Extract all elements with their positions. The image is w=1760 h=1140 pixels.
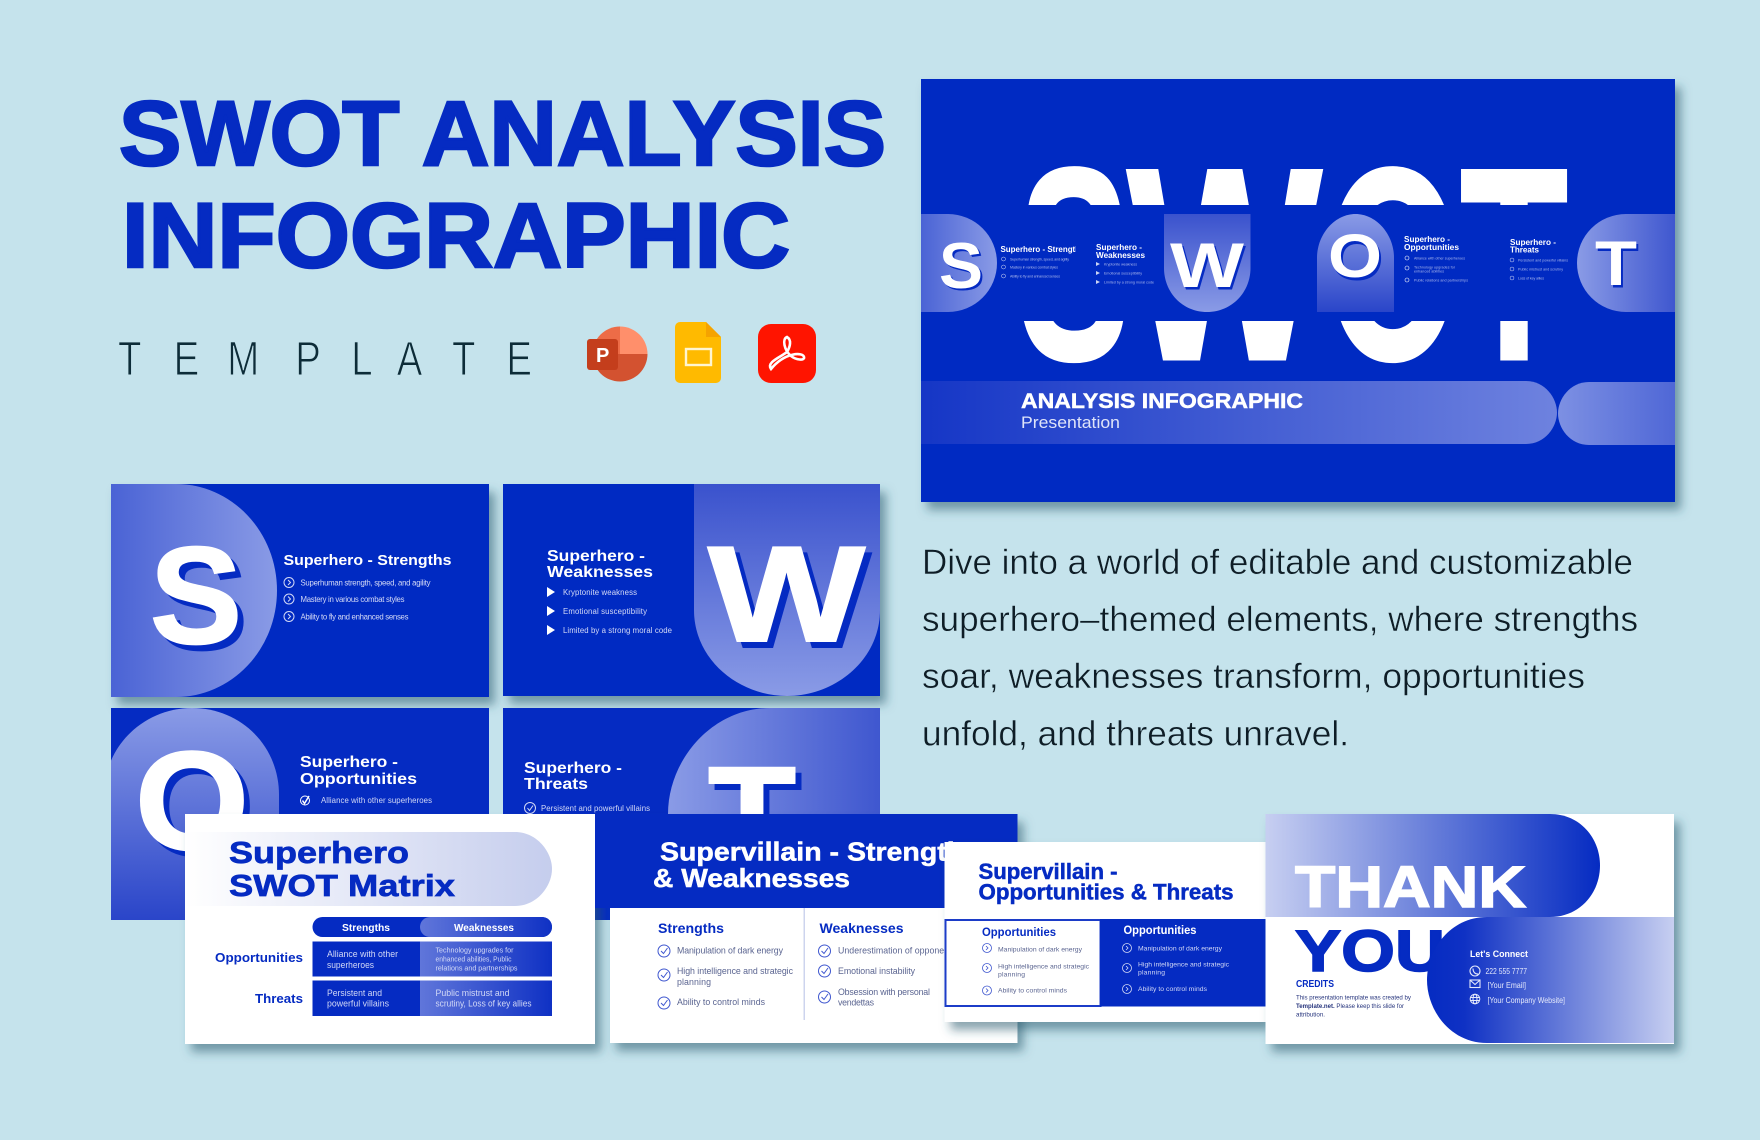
O letter: O — [135, 722, 249, 879]
matrix row 2: Public mistrust and — [436, 988, 510, 999]
cover title: ANALYSIS INFOGRAPHIC — [1021, 390, 1303, 413]
villain heading — [653, 836, 980, 893]
row label: opportunities: Opportunities — [215, 950, 303, 965]
big clipped SWOT word: W — [1127, 112, 1324, 418]
mini strengths text: Mastery in various combat styles — [1010, 265, 1058, 269]
panel: weaknesses slide — [503, 484, 880, 696]
column: strengths: Strengths — [658, 921, 724, 936]
mini weaknesses text: Emotional susceptibility — [1104, 271, 1142, 275]
matrix header pill: Weaknesses — [454, 922, 514, 934]
T letter — [708, 766, 802, 814]
filled box: Manipulation of dark energy — [1138, 946, 1223, 952]
big clipped SWOT word: S — [1018, 112, 1130, 418]
title — [119, 83, 886, 287]
mini weaknesses text: Kryptonite weakness — [1104, 262, 1137, 266]
strengths list: Ability to fly and enhanced senses — [300, 612, 409, 622]
column: strengths — [658, 921, 794, 1009]
weaknesses list: Emotional susceptibility — [563, 607, 647, 616]
S tab: S — [939, 229, 983, 302]
matrix row 2 — [312, 980, 552, 1016]
S tab: S — [941, 231, 985, 304]
icon: pdf — [758, 324, 816, 383]
matrix row 1: relations and partnerships — [436, 964, 518, 972]
column: strengths: Manipulation of dark energy — [677, 946, 784, 956]
column: strengths: Ability to control minds — [677, 997, 766, 1007]
weaknesses list: Kryptonite weakness — [563, 588, 637, 597]
T shape — [668, 708, 880, 814]
column: weaknesses: Emotional instability — [838, 966, 916, 976]
strengths list: Superhuman strength, speed, and agility — [300, 578, 431, 588]
mini weaknesses text: Limited by a strong moral code — [1104, 280, 1154, 284]
column: strengths: planning — [677, 977, 711, 987]
opportunities heading: Superhero - — [300, 754, 398, 771]
weaknesses heading — [547, 548, 653, 581]
subtitle: template: TEMPLATE — [118, 333, 532, 386]
filled box: Opportunities — [1124, 925, 1196, 937]
slide heading — [978, 859, 1234, 904]
column: strengths: High intelligence and strategic — [677, 966, 794, 976]
slide heading: Supervillain - — [978, 859, 1118, 884]
T letter: T — [708, 739, 796, 892]
mini opportunities text: Public relations and partnerships — [1414, 278, 1468, 282]
panel: supervillain opportunities and threats slide — [944, 842, 1266, 1022]
icon: powerpoint: P — [596, 345, 609, 367]
filled box: High intelligence and strategic — [1138, 962, 1230, 968]
matrix title: SWOT Matrix — [229, 868, 456, 903]
filled box: planning — [1138, 970, 1165, 976]
matrix title: Superhero — [229, 835, 409, 870]
contact block: 222 555 7777 — [1486, 966, 1527, 976]
threats items: and — [597, 823, 610, 832]
matrix row 2: Persistent and — [327, 988, 382, 999]
outlined box: High intelligence and strategic — [998, 964, 1090, 970]
O tab: O — [1328, 222, 1382, 290]
mini threats text: Loss of key allies — [1518, 276, 1544, 280]
contact block: [Your Email] — [1488, 980, 1526, 990]
icon: google slides — [675, 322, 721, 383]
slide heading: Opportunities & Threats — [978, 880, 1234, 904]
matrix title pill — [185, 832, 552, 906]
big clipped SWOT word: O — [1326, 112, 1460, 418]
column: weaknesses — [818, 923, 944, 1006]
matrix row 2: powerful villains — [327, 998, 389, 1010]
matrix row 2: scrutiny, Loss of key allies — [436, 998, 532, 1010]
bottom gradient pill — [1427, 917, 1674, 1043]
mini opportunities text: Opportunities — [1404, 242, 1459, 252]
filled box — [1100, 919, 1266, 1006]
weaknesses list — [547, 587, 672, 635]
opportunities item: Alliance with other superheroes — [321, 796, 432, 805]
W tab: W — [1170, 231, 1245, 301]
W tab: W — [1172, 234, 1247, 304]
panel: thank you slide — [1266, 814, 1674, 1044]
big clipped SWOT word — [1024, 166, 1568, 364]
row label: threats: Threats — [255, 991, 303, 1006]
T tab: T — [1597, 232, 1639, 302]
weaknesses list: Limited by a strong moral code — [563, 626, 672, 635]
weaknesses heading: Weaknesses — [547, 564, 653, 581]
threats heading: Superhero - — [524, 760, 622, 777]
contact block: Let's Connect — [1470, 949, 1529, 960]
weaknesses heading: Superhero - — [547, 548, 645, 565]
mini strengths text — [1000, 246, 1076, 278]
description paragraph: soar, weaknesses transform, opportunities — [922, 657, 1585, 696]
O letter — [140, 750, 250, 856]
mini strengths text: Superhero - Strengths — [1000, 244, 1085, 254]
description paragraph — [922, 543, 1638, 754]
icon: email — [1470, 980, 1480, 988]
outlined box: Manipulation of dark energy — [998, 946, 1083, 954]
description paragraph: superhero–themed elements, where strengths — [922, 600, 1638, 639]
panel: superhero swot matrix slide — [185, 814, 595, 1044]
column: weaknesses: vendettas — [838, 998, 875, 1008]
contact block: [Your Company Website] — [1488, 995, 1565, 1005]
description paragraph: Dive into a world of editable and customizable — [922, 543, 1633, 582]
W letter: W — [708, 518, 866, 670]
mini opportunities text: Technology upgrades for — [1414, 265, 1456, 269]
mini threats text: Threats — [1510, 244, 1539, 254]
mini threats text: Superhero - — [1510, 237, 1556, 247]
panel: opportunities slide — [104, 708, 489, 920]
credits text: This presentation template was created by — [1296, 994, 1412, 1002]
strengths list — [284, 578, 431, 622]
credits text: Template.net. Please keep this slide for — [1296, 1003, 1405, 1010]
big clipped SWOT word: T — [1460, 112, 1568, 418]
strengths list: Mastery in various combat styles — [300, 595, 405, 604]
outlined box — [946, 920, 1100, 1006]
filled box: Ability to control minds — [1138, 986, 1208, 993]
icon: powerpoint — [587, 326, 648, 381]
credits heading: CREDITS — [1296, 978, 1334, 990]
thank word: THANK — [1295, 855, 1526, 920]
mini opportunities text: enhanced abilities — [1414, 269, 1444, 273]
W shape — [694, 484, 880, 696]
mini strengths text: Ability to fly and enhanced senses — [1010, 274, 1060, 278]
matrix row 1: Technology upgrades for — [436, 946, 514, 954]
matrix row 1 — [312, 942, 552, 976]
W letter: W — [714, 524, 872, 676]
panel: strengths slide — [111, 484, 489, 697]
W tab — [1164, 214, 1250, 312]
threats heading: Threats — [524, 776, 588, 793]
S shape — [111, 484, 277, 697]
mini weaknesses text — [1096, 242, 1154, 284]
mini opportunities text: Alliance with other superheroes — [1414, 256, 1465, 260]
mini opportunities text: Superhero - — [1404, 234, 1450, 244]
credits text: attribution. — [1296, 1012, 1325, 1018]
O tab — [1317, 214, 1394, 312]
T tab: T — [1595, 229, 1637, 299]
contact block — [1470, 949, 1565, 1005]
credits text — [1296, 994, 1412, 1018]
title: INFOGRAPHIC — [122, 185, 790, 287]
O tab: O — [1330, 225, 1384, 293]
S letter: S — [156, 525, 248, 679]
bottom title bar — [921, 381, 1557, 444]
S letter: S — [150, 519, 242, 673]
matrix header pill: Strengths — [342, 922, 390, 934]
mini threats text: Public mistrust and scrutiny — [1518, 267, 1563, 271]
outlined box: Opportunities — [982, 927, 1056, 939]
top gradient pill — [1266, 814, 1600, 917]
threats items: Persistent and powerful villains — [541, 804, 650, 813]
villain header band — [595, 814, 1018, 908]
you word: YOU — [1295, 919, 1445, 984]
column divider — [804, 908, 805, 1020]
column: weaknesses: Weaknesses — [820, 921, 904, 936]
villain heading: Supervillain - Strengths — [660, 836, 980, 866]
panel: supervillain strengths and weaknesses slide — [595, 814, 1018, 1043]
matrix header pill — [312, 917, 552, 937]
O shape — [104, 708, 279, 920]
S tab — [921, 214, 997, 312]
column: weaknesses: Obsession with personal — [838, 987, 930, 997]
matrix row 1: enhanced abilities, Public — [436, 954, 512, 964]
panel: threats slide — [503, 708, 880, 920]
description paragraph: unfold, and threats unravel. — [922, 714, 1349, 754]
mini opportunities text — [1404, 234, 1468, 282]
mini threats text — [1510, 237, 1568, 280]
threats heading — [524, 762, 622, 789]
O letter: O — [141, 728, 255, 885]
outlined box: planning — [998, 972, 1025, 978]
icon: globe — [1470, 994, 1480, 1004]
matrix row 1: Alliance with other — [327, 949, 398, 960]
matrix row 1: superheroes — [327, 960, 374, 971]
icon: phone — [1470, 966, 1480, 976]
matrix title — [229, 835, 456, 903]
right bar — [1558, 382, 1675, 445]
T letter: T — [714, 745, 802, 898]
column: weaknesses: Underestimation of opponents — [838, 946, 957, 956]
panel: main cover slide — [921, 79, 1675, 502]
threats items — [524, 802, 650, 814]
cover subtitle: Presentation — [1021, 414, 1120, 432]
opportunities heading — [300, 754, 417, 788]
mini strengths text: Superhuman strength, speed, and agility — [1010, 257, 1069, 261]
mini weaknesses text: Superhero - — [1096, 242, 1142, 252]
outlined box: Ability to control minds — [998, 988, 1068, 994]
mini threats text: Persistent and powerful villains — [1518, 258, 1568, 262]
title: SWOT ANALYSIS — [119, 83, 886, 185]
strengths heading: Superhero - Strengths — [284, 552, 452, 569]
T tab — [1577, 214, 1675, 312]
villain heading: & Weaknesses — [653, 863, 850, 893]
mini weaknesses text: Weaknesses — [1096, 250, 1145, 260]
opportunities heading: Opportunities — [300, 771, 417, 788]
